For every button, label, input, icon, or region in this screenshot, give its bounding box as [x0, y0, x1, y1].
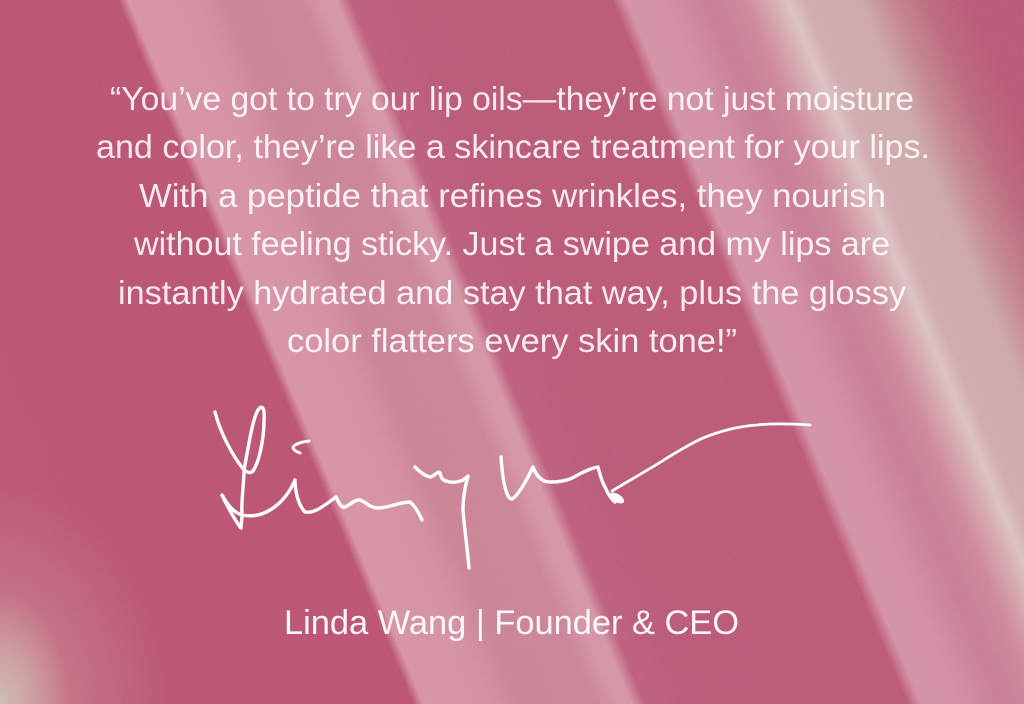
signature ink blob: [608, 490, 626, 506]
quote text: [96, 81, 930, 360]
quote text: With a peptide that refines wrinkles, they nourish: [139, 178, 886, 215]
quote text: “You’ve got to try our lip oils—they’re not just moisture: [110, 81, 914, 118]
quote text: and color, they’re like a skincare treatment for your lips.: [96, 129, 930, 166]
attribution: Linda Wang | Founder & CEO: [284, 604, 739, 642]
signature: [215, 407, 810, 568]
quote text: color flatters every skin tone!”: [287, 323, 737, 360]
quote text: instantly hydrated and stay that way, plus the glossy: [118, 275, 906, 312]
quote text: without feeling sticky. Just a swipe and my lips are: [133, 226, 890, 263]
